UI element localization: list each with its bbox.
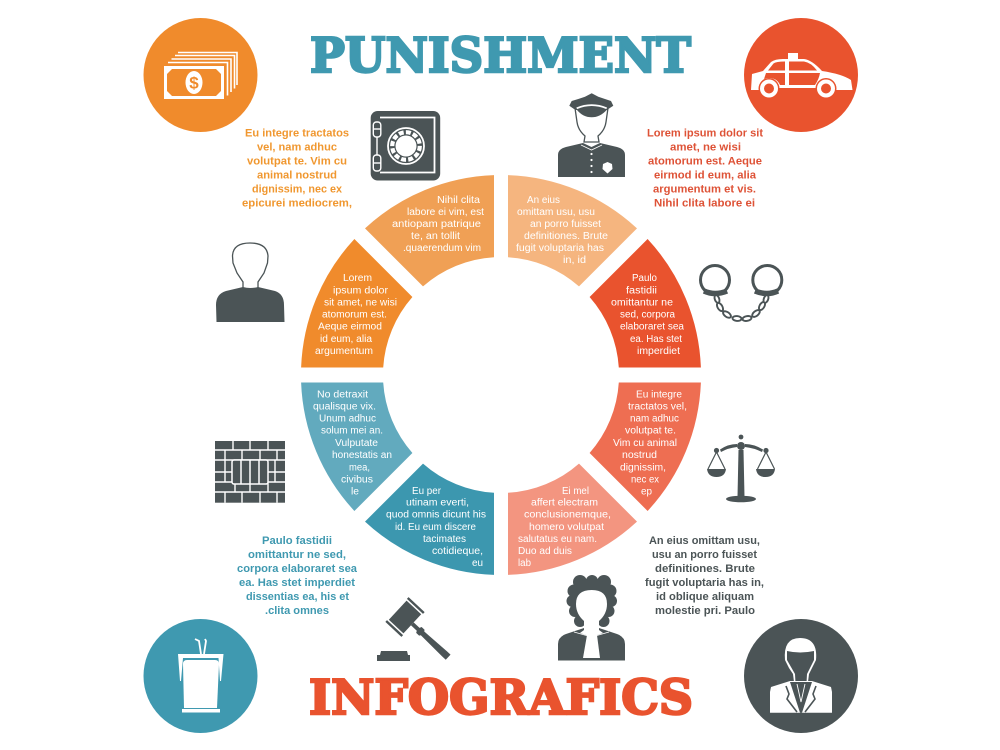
panel: lower-right wedge: [508, 464, 637, 575]
panel: left lower wedge: civibus: [341, 474, 373, 486]
panel: upper-left wedge: Nihil clita: [437, 195, 480, 206]
text block: teal: .clita omnes: [265, 605, 329, 617]
panel: right upper wedge: fastidii: [626, 286, 657, 296]
panel: left upper wedge: id eum, alia: [320, 334, 372, 345]
panel: lower-left wedge: utinam everti,: [406, 498, 469, 508]
icon: gavel: [377, 597, 460, 670]
panel: right lower wedge: ep: [641, 486, 652, 498]
text block: orange: Eu integre tractatos: [245, 128, 349, 140]
panel: upper-left wedge: te, an tollit: [411, 231, 460, 242]
panel: lower-right wedge: Duo ad duis: [518, 546, 572, 557]
panel: lower-right wedge: lab: [518, 558, 531, 569]
panel: lower-left wedge: id. Eu eum discere: [395, 522, 476, 533]
panel: upper-right wedge: omittam usu, usu: [517, 207, 595, 218]
text block: red: argumentum et vis.: [653, 184, 756, 196]
icon: police car in red circle: [744, 18, 858, 132]
panel: right upper wedge: imperdiet: [637, 346, 680, 357]
panel: right lower wedge: nec ex: [631, 474, 659, 486]
icon: money in orange circle: [144, 18, 258, 132]
text block: orange: epicurei mediocrem,: [242, 198, 352, 210]
text block: orange: vel, nam adhuc: [257, 142, 337, 154]
icon: money in orange circle: $: [189, 74, 199, 92]
text block: red: Nihil clita labore ei: [654, 198, 755, 210]
text block: teal: corpora elaboraret sea: [237, 563, 358, 575]
panel: lower-right wedge: salutatus eu nam.: [518, 534, 597, 545]
panel: upper-right wedge: in, id: [563, 255, 586, 266]
panel: upper-right wedge: An eius: [527, 195, 560, 206]
title: INFOGRAFICS: INFOGRAFICS: [309, 670, 693, 726]
panel: lower-left wedge: eu: [472, 558, 483, 569]
panel: right lower wedge: nostrud: [622, 450, 657, 461]
panel: left upper wedge: sit amet, ne wisi: [324, 298, 397, 308]
panel: left upper wedge: Lorem: [343, 273, 372, 284]
panel: upper-right wedge: an porro fuisset: [530, 219, 601, 230]
text block: teal: ea. Has stet imperdiet: [239, 577, 355, 589]
icon: scales of justice: [707, 435, 775, 502]
text block: teal: [237, 535, 358, 617]
panel: left lower wedge: No detraxit: [317, 390, 368, 400]
panel: upper-right wedge: fugit voluptaria has: [516, 243, 604, 254]
icon: safe: [371, 111, 440, 180]
panel: left upper wedge: argumentum: [315, 346, 373, 357]
icon: podium in teal circle: [144, 619, 258, 733]
panel: left lower wedge: qualisque vix.: [313, 402, 376, 412]
panel: lower-right wedge: homero volutpat: [529, 522, 604, 533]
panel: lower-right wedge: conclusionemque,: [524, 510, 611, 520]
icon: businessman in gray circle: [744, 619, 858, 733]
text block: red: eirmod id eum, alia: [654, 170, 757, 182]
icon: judge with wig: [558, 575, 625, 660]
icon: handcuffs: [700, 266, 782, 322]
panel: lower-left wedge: quod omnis dicunt his: [386, 510, 486, 520]
panel: lower-left wedge: tacimates: [423, 534, 466, 545]
text block: gray: usu an porro fuisset: [652, 549, 757, 561]
panel: right upper wedge: ea. Has stet: [630, 334, 682, 345]
text block: gray: molestie pri. Paulo: [655, 605, 755, 617]
panel: upper-left wedge: .quaerendum vim: [403, 243, 481, 254]
panel: left lower wedge: [301, 382, 412, 511]
panel: upper-right wedge: [508, 175, 637, 286]
text block: teal: omittantur ne sed,: [248, 549, 346, 561]
panel: upper-left wedge: labore ei vim, est: [407, 207, 484, 218]
panel: right upper wedge: Paulo: [632, 273, 657, 284]
panel: right lower wedge: Vim cu animal: [613, 438, 677, 449]
text block: orange: animal nostrud: [257, 170, 337, 182]
panel: right lower wedge: tractatos vel,: [628, 402, 687, 412]
text block: gray: [645, 535, 764, 617]
panel: lower-right wedge: affert electram: [531, 498, 598, 508]
panel: right upper wedge: [590, 239, 701, 368]
panel: right lower wedge: Eu integre: [636, 390, 682, 400]
panel: lower-left wedge: [365, 464, 494, 575]
panel: upper-right wedge: definitiones. Brute: [524, 231, 608, 242]
icon: police officer: [558, 93, 625, 177]
panel: left upper wedge: Aeque eirmod: [318, 322, 382, 332]
panel: left upper wedge: atomorum est.: [322, 310, 387, 320]
icon: person outline: [216, 243, 284, 322]
text block: gray: id oblique aliquam: [656, 591, 754, 603]
panel: left lower wedge: honestatis an: [332, 450, 392, 461]
panel: right lower wedge: nam adhuc: [630, 414, 679, 424]
text block: gray: definitiones. Brute: [655, 563, 755, 575]
text block: orange: [242, 128, 352, 210]
panel: lower-left wedge: cotidieque,: [432, 546, 483, 557]
text block: gray: An eius omittam usu,: [649, 535, 760, 547]
panel: right lower wedge: dignissim,: [620, 462, 666, 474]
title: PUNISHMENT: PUNISHMENT: [310, 28, 691, 84]
text block: teal: dissentias ea, his et: [246, 591, 349, 603]
panel: left lower wedge: Unum adhuc: [319, 414, 376, 424]
text block: red: amet, ne wisi: [670, 142, 741, 154]
text block: red: atomorum est. Aeque: [648, 156, 762, 168]
panel: upper-left wedge: antiopam patrique: [392, 219, 481, 230]
text block: teal: Paulo fastidii: [262, 535, 332, 547]
panel: right lower wedge: volutpat te.: [625, 426, 676, 436]
panel: upper-left wedge: [365, 175, 494, 286]
panel: right upper wedge: omittantur ne: [611, 298, 673, 308]
panel: lower-left wedge: Eu per: [412, 486, 442, 497]
panel: right upper wedge: sed, corpora: [620, 310, 675, 320]
text block: red: Lorem ipsum dolor sit: [647, 128, 763, 140]
panel: left upper wedge: [301, 239, 412, 368]
panel: lower-right wedge: Ei mel: [562, 486, 589, 497]
icon: brick wall with barred window: [215, 441, 285, 503]
text block: gray: fugit voluptaria has in,: [645, 577, 764, 589]
panel: right lower wedge: [590, 382, 701, 511]
panel: right upper wedge: elaboraret sea: [620, 322, 684, 332]
panel: left lower wedge: solum mei an.: [321, 426, 383, 436]
text block: orange: volutpat te. Vim cu: [247, 156, 347, 168]
text block: orange: dignissim, nec ex: [252, 184, 343, 196]
panel: left lower wedge: le: [351, 486, 359, 498]
panel: left lower wedge: Vulputate: [335, 438, 378, 449]
text block: red: [647, 128, 763, 210]
panel: left upper wedge: ipsum dolor: [333, 286, 389, 296]
panel: left lower wedge: mea,: [349, 462, 370, 474]
